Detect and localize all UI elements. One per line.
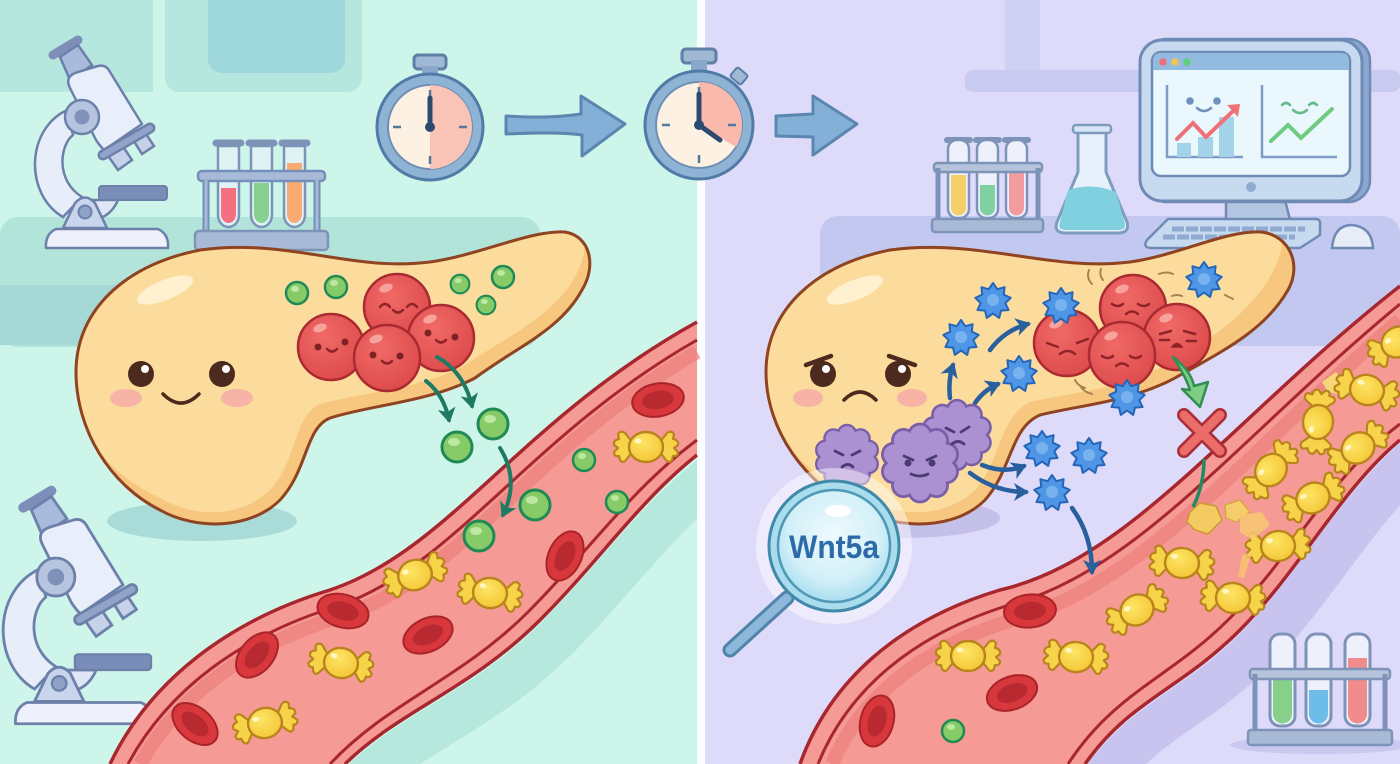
icon: test tube rack left — [195, 143, 328, 250]
blocked insulin arrow and red X — [1173, 357, 1220, 507]
face: happy — [110, 361, 253, 407]
icon: microscope bottom left — [3, 491, 152, 724]
arrow: after right stopwatch — [776, 96, 857, 155]
centre divider — [697, 0, 705, 764]
icon: computer monitor with charts — [1140, 39, 1370, 220]
blue Wnt5a stars — [943, 262, 1222, 510]
background: left panel — [0, 0, 720, 764]
arrow: between stopwatches — [506, 96, 625, 156]
icon: microscope top left — [35, 40, 168, 248]
icon: flask — [1056, 125, 1128, 233]
chart: red upward line chart — [1167, 85, 1243, 157]
blood vessel left — [110, 322, 697, 764]
contents of left vessel: red cells, candies, insulin — [164, 379, 686, 753]
icon: mouse — [1332, 225, 1373, 248]
magnifying glass with Wnt5a label — [730, 468, 912, 650]
label: Wnt5a: Wnt5a — [789, 529, 879, 565]
background: right panel — [705, 0, 1400, 764]
beta cell cluster right — [1034, 269, 1233, 394]
icon: keyboard — [1145, 219, 1320, 248]
icon: stopwatch left — [377, 55, 483, 180]
arrows: Wnt5a signal — [949, 324, 1092, 572]
contents of right vessel: red cells, candies, insulin — [854, 313, 1400, 750]
icon: test tube rack bottom right — [1230, 634, 1400, 754]
faded candy fragments near right vessel — [1322, 372, 1346, 394]
beta cell cluster left — [298, 274, 474, 391]
pancreas left with face — [60, 220, 610, 541]
golden broken insulin splat — [1187, 500, 1270, 578]
face: worried — [793, 356, 927, 407]
icon: test tube rack right top — [932, 140, 1043, 232]
green insulin dots in left pancreas — [286, 266, 514, 314]
blood vessel right — [800, 286, 1400, 764]
pancreas right with sad face — [750, 220, 1310, 540]
chart: green line chart — [1262, 85, 1337, 157]
arrows: insulin release left — [426, 357, 511, 515]
macrophage cells — [816, 400, 991, 502]
icon: stopwatch right — [645, 49, 753, 179]
